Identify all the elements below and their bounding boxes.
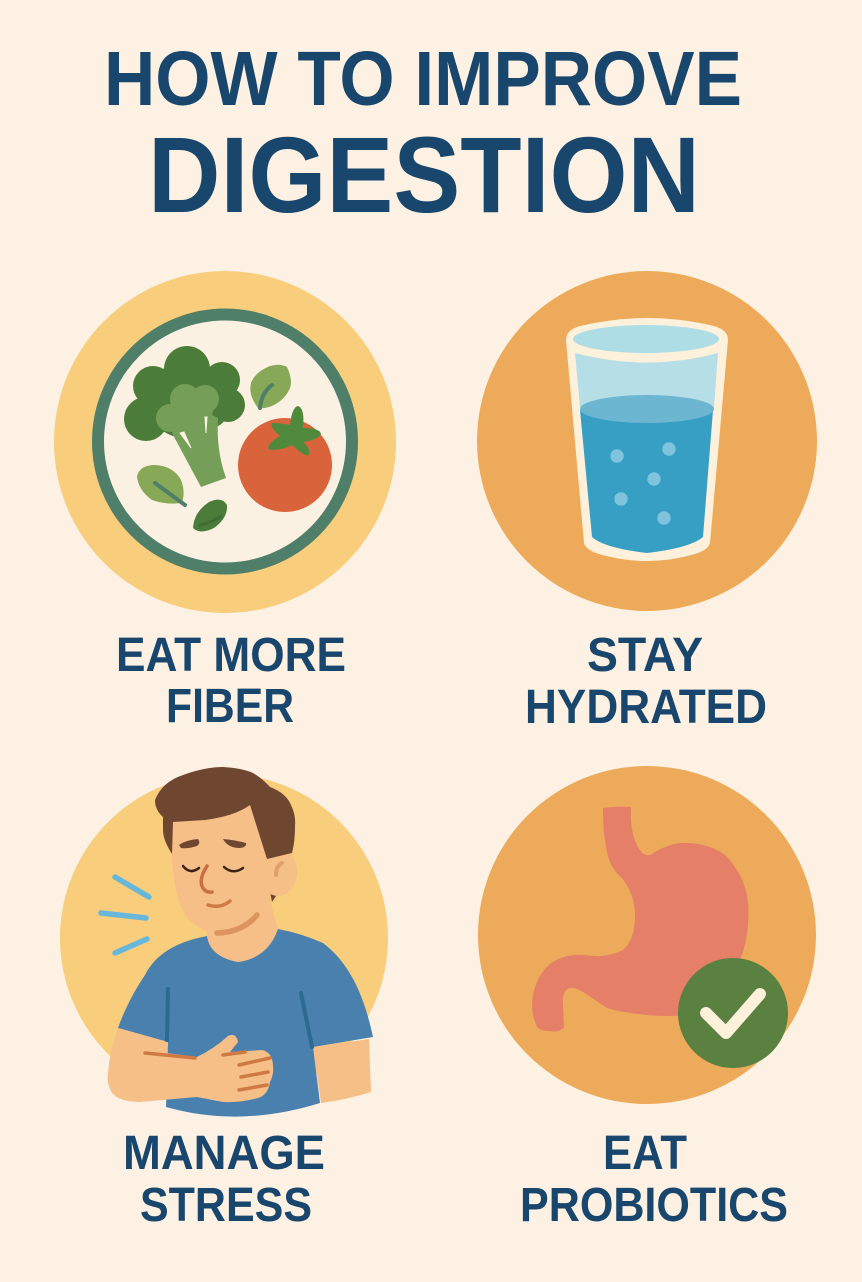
icon: glass of water <box>477 271 817 611</box>
label: manage stress <box>123 1127 325 1232</box>
label: manage stress: STRESS <box>140 1179 312 1232</box>
label: stay hydrated: STAY <box>587 629 703 682</box>
title: DIGESTION <box>148 114 700 235</box>
label: stay hydrated <box>525 629 767 734</box>
panel: stay hydrated <box>477 271 817 734</box>
panel: manage stress <box>60 767 388 1232</box>
label: eat probiotics <box>520 1127 788 1232</box>
title: HOW TO IMPROVE <box>104 36 742 122</box>
label: manage stress: MANAGE <box>123 1127 325 1180</box>
label: eat more fiber: FIBER <box>166 680 294 733</box>
label: stay hydrated: HYDRATED <box>525 681 767 734</box>
label: eat more fiber <box>116 629 346 733</box>
title <box>104 36 742 235</box>
label: eat probiotics: PROBIOTICS <box>520 1179 788 1232</box>
label: eat probiotics: EAT <box>603 1127 687 1180</box>
icon: man holding stomach <box>60 767 388 1117</box>
icon: stomach with check mark <box>478 766 816 1104</box>
panel: eat probiotics <box>478 766 816 1232</box>
icon: plate of vegetables <box>54 271 396 613</box>
panel: eat more fiber <box>54 271 396 733</box>
label: eat more fiber: EAT MORE <box>116 629 346 682</box>
